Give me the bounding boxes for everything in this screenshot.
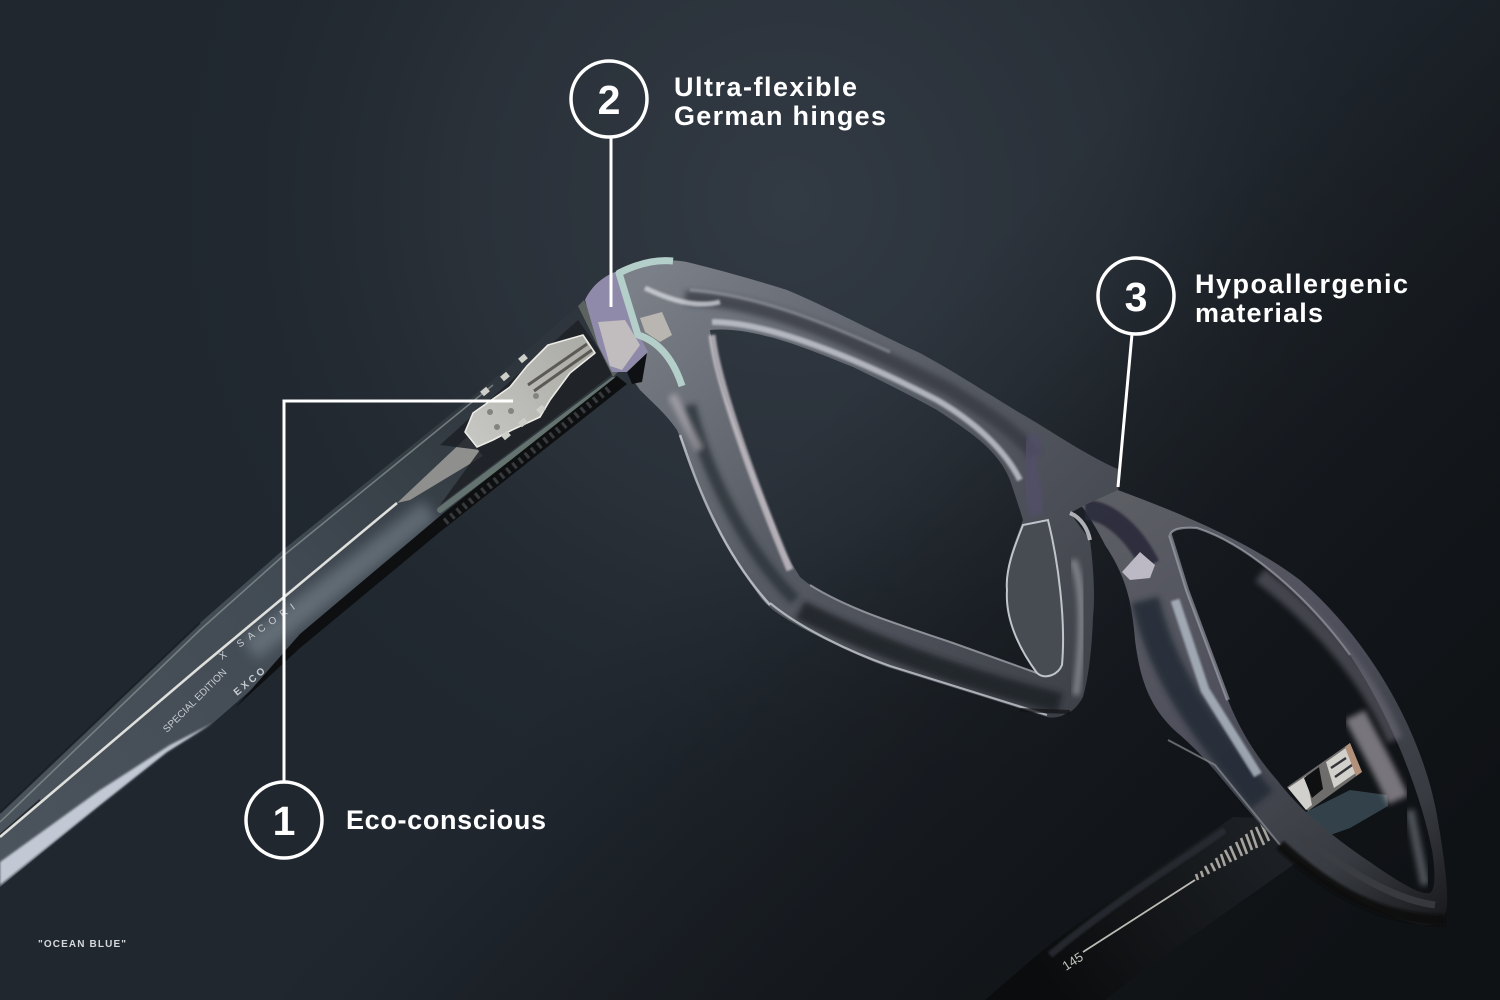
callout 3: hypoallergenic xyxy=(1098,258,1408,487)
number badge 3: 3 xyxy=(1125,274,1147,320)
ribbed dark lower edge xyxy=(235,376,627,708)
label 2: German hinges xyxy=(674,101,886,131)
number badge 2 xyxy=(571,61,647,137)
leader line 1 xyxy=(284,401,513,782)
near temple arm xyxy=(0,300,627,887)
colour name caption: "OCEAN BLUE" xyxy=(38,939,126,950)
dark interior near the hinge xyxy=(440,320,615,505)
far temple arm xyxy=(985,743,1388,1000)
ridged core wire xyxy=(1196,823,1269,880)
translucent core behind hinge xyxy=(1300,790,1388,838)
label 1: Eco-conscious xyxy=(346,805,546,835)
label 3: materials xyxy=(1195,298,1323,328)
left rim xyxy=(605,260,1120,718)
photo: clear eyeglasses xyxy=(0,260,1447,1000)
leader line 2 xyxy=(610,137,612,307)
hinge block xyxy=(585,271,648,372)
label 2 xyxy=(674,72,886,131)
mint edge stripe xyxy=(619,261,682,386)
guitar headstock plate xyxy=(465,335,595,447)
number badge 1 xyxy=(246,782,322,858)
callout 1: eco-conscious xyxy=(246,401,546,858)
temple engraving xyxy=(161,598,302,735)
callout 2: German hinges xyxy=(571,61,886,307)
leader line 3 xyxy=(1118,334,1132,487)
temple engraving: EXCO xyxy=(232,664,270,698)
right rim xyxy=(1077,478,1447,925)
eyeglass front frame xyxy=(585,260,1447,925)
right rim details xyxy=(1085,510,1445,920)
number badge 3 xyxy=(1098,258,1174,334)
left rim details xyxy=(645,288,1082,715)
hinge end plate xyxy=(578,300,618,377)
label 3 xyxy=(1195,269,1408,328)
nose pad xyxy=(1007,520,1063,676)
temple engraving: X SACORI xyxy=(217,598,302,662)
bridge flange highlight xyxy=(1070,513,1090,540)
mint bar xyxy=(440,380,613,510)
label 2: Ultra-flexible xyxy=(674,72,857,102)
temple engraving: SPECIAL EDITION xyxy=(161,667,229,735)
rivet inlay xyxy=(640,312,672,342)
number badge 1: 1 xyxy=(273,798,295,844)
hinge metal xyxy=(1287,743,1362,811)
far temple arm: 145 xyxy=(1059,949,1086,974)
label 3: Hypoallergenic xyxy=(1195,269,1408,299)
core wire and metal wedge xyxy=(0,503,397,837)
number badge 2: 2 xyxy=(598,77,620,123)
